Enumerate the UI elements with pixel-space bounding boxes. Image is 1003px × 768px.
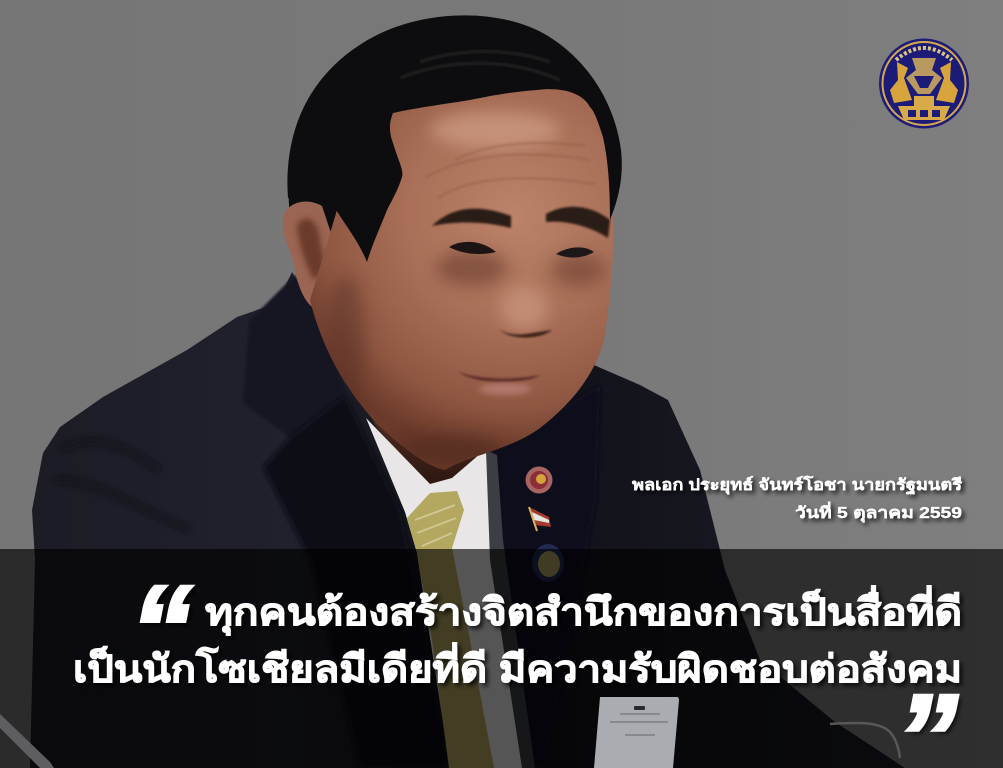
caption: name and date: วันที่ 5 ตุลาคม 2559 — [795, 501, 962, 523]
seal top decoration — [896, 48, 952, 60]
forehead highlight — [430, 112, 560, 148]
shirt lower shade — [486, 450, 535, 768]
quote line 1: ทุกคนต้องสร้างจิตสำนึกของการเป็นสื่อที่ดี — [205, 585, 962, 636]
right eye — [556, 247, 594, 258]
right lapel — [490, 385, 600, 768]
shirt and collar — [366, 418, 525, 768]
face — [310, 80, 613, 470]
right eyebrow — [546, 207, 610, 238]
shoulder folds — [55, 442, 190, 530]
ear — [283, 202, 350, 312]
hair behind ear — [288, 180, 365, 265]
cheek shadow — [325, 275, 365, 415]
necktie — [407, 491, 494, 768]
seal left guardian lion — [890, 62, 912, 103]
left lapel — [263, 395, 450, 768]
sleeve highlight left — [0, 714, 54, 768]
quote banner — [0, 549, 1003, 768]
seal base openings — [908, 110, 940, 117]
seal central urn — [906, 58, 942, 94]
right eye socket — [550, 253, 606, 287]
quote line 2: เป็นนักโซเชียลมีเดียที่ดี มีความรับผิดชอบต่อสังคม — [73, 642, 962, 691]
seal urn interior — [914, 76, 934, 88]
lapel pin: dark round — [532, 544, 564, 582]
left eyebrow — [432, 209, 511, 228]
nose — [500, 286, 552, 338]
neck — [352, 320, 560, 490]
jacket collar — [243, 275, 345, 437]
mouth — [458, 372, 541, 395]
lapel pin: emblem — [526, 466, 552, 494]
sleeve highlight right — [830, 723, 900, 758]
caption: name and date: พลเอก ประยุทธ์ จันทร์โอชา นายกรัฐมนตรี — [632, 475, 963, 495]
suit jacket — [30, 272, 905, 768]
lanyard badge — [594, 697, 679, 768]
lapel pin: Thai flag — [529, 507, 551, 531]
left eye socket — [436, 250, 508, 286]
hair sheen — [400, 52, 560, 80]
caption: name and date — [632, 475, 963, 523]
emblem: government seal — [879, 38, 969, 128]
seal right guardian lion — [936, 62, 958, 103]
quote text — [73, 561, 962, 699]
hair — [287, 15, 622, 262]
forehead wrinkles — [425, 143, 595, 198]
seal base pavilion — [898, 96, 950, 120]
left eye — [449, 242, 496, 254]
opening quote mark: “ — [130, 561, 192, 699]
chin shadow — [395, 434, 505, 466]
